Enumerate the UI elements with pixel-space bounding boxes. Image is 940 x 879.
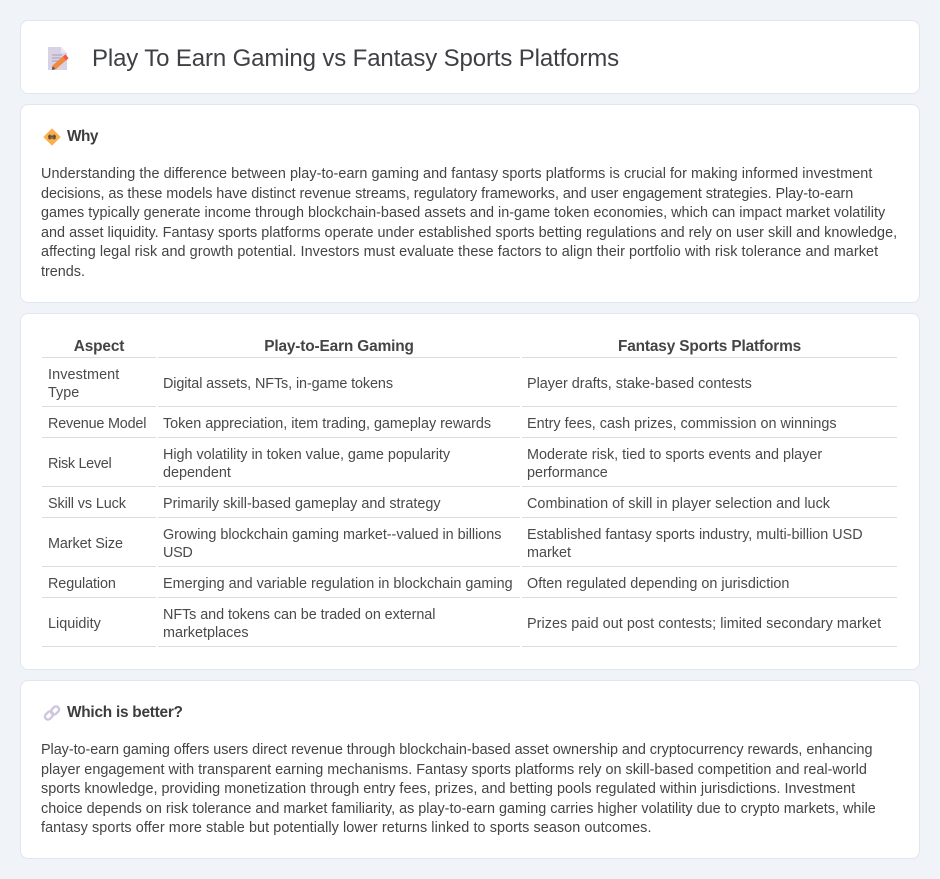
text block: why: trends. (41, 264, 85, 280)
row: market size: Market Size (48, 536, 123, 552)
cell: fantasy investment type: Player drafts, stake-based contests (527, 376, 752, 392)
panel: which is better (20, 680, 920, 859)
cell: p2e liquidity (163, 607, 435, 641)
row: investment type: Investment (48, 367, 119, 383)
text block: which is better: sports knowledge, providing monetization through entry fees, prizes, and betting pools regulated within jurisdictions. Investment (41, 781, 855, 797)
icon: document with pencil (48, 47, 69, 70)
cell: fantasy risk level: Moderate risk, tied to sports events and player (527, 447, 822, 463)
cell: fantasy revenue model: Entry fees, cash prizes, commission on winnings (527, 416, 837, 432)
row: liquidity: Liquidity (48, 616, 101, 632)
cell: fantasy skill vs luck: Combination of skill in player selection and luck (527, 496, 830, 512)
table header: play-to-earn gaming: Play-to-Earn Gaming (264, 338, 414, 355)
row: regulation: Regulation (48, 576, 116, 592)
cell: fantasy risk level: performance (527, 465, 608, 481)
text block: why: and asset liquidity. Fantasy sports platforms operate under established sports betting regulations and rely on user skill and knowledge, (41, 224, 897, 240)
cell: p2e revenue model: Token appreciation, item trading, gameplay rewards (163, 416, 491, 432)
cell: p2e risk level (163, 447, 450, 481)
cell: p2e market size (163, 527, 501, 561)
cell: p2e liquidity: NFTs and tokens can be traded on external (163, 607, 435, 623)
cell: p2e market size: USD (163, 545, 192, 561)
text block: why: Understanding the difference between play-to-earn gaming and fantasy sports platforms is crucial for making informed investment (41, 166, 872, 182)
text block: which is better: Play-to-earn gaming offers users direct revenue through blockchain-based asset ownership and cryptocurrency rewards, enhancing (41, 742, 872, 758)
text block: which is better (41, 742, 876, 836)
cell: fantasy market size (527, 527, 863, 561)
cell: p2e risk level: dependent (163, 465, 231, 481)
cell: fantasy risk level (527, 447, 822, 481)
icon: warning diamond (44, 128, 60, 146)
table header: fantasy sports platforms: Fantasy Sports Platforms (618, 338, 801, 355)
cell: fantasy market size: Established fantasy sports industry, multi-billion USD (527, 527, 863, 543)
title: Play To Earn Gaming vs Fantasy Sports Platforms (92, 45, 619, 72)
panel: comparison table (20, 313, 920, 670)
panel: header (20, 20, 920, 94)
row: investment type: Type (48, 385, 79, 401)
text block: which is better: player engagement with transparent earning mechanisms. Fantasy sports platforms rely on skill-based competition and real-world (41, 762, 867, 778)
text block: why (41, 166, 897, 280)
row: skill vs luck: Skill vs Luck (48, 496, 126, 512)
cell: p2e market size: Growing blockchain gaming market--valued in billions (163, 527, 501, 543)
cell: p2e risk level: High volatility in token value, game popularity (163, 447, 450, 463)
cell: p2e investment type: Digital assets, NFTs, in-game tokens (163, 376, 393, 392)
heading: why: Why (67, 128, 98, 145)
panel: why (20, 104, 920, 303)
icon: chain link (44, 705, 60, 721)
text block: which is better: choice depends on risk tolerance and market familiarity, as play-to-earn gaming carries higher volatility due to crypto markets, while (41, 800, 876, 816)
cell: fantasy regulation: Often regulated depending on jurisdiction (527, 576, 789, 592)
cell: fantasy market size: market (527, 545, 571, 561)
row: investment type (48, 367, 120, 401)
text block: why: decisions, as these models have distinct revenue streams, regulatory frameworks, and user engagement strategies. Play-to-earn (41, 186, 853, 202)
text block: why: affecting legal risk and growth potential. Investors must evaluate these factors to align their portfolio with risk tolerance and market (41, 244, 878, 260)
row: risk level: Risk Level (48, 456, 111, 472)
text block: which is better: fantasy sports offer more stable but potentially lower returns linked to sports season outcomes. (41, 820, 652, 836)
table header: aspect: Aspect (74, 338, 124, 355)
heading: which is better: Which is better? (67, 704, 183, 721)
cell: p2e regulation: Emerging and variable regulation in blockchain gaming (163, 576, 513, 592)
text block: why: games typically generate income through blockchain-based assets and in-game token economies, which can impact market volatility (41, 205, 885, 221)
cell: fantasy liquidity: Prizes paid out post contests; limited secondary market (527, 616, 881, 632)
cell: p2e liquidity: marketplaces (163, 625, 249, 641)
row: revenue model: Revenue Model (48, 416, 146, 432)
cell: p2e skill vs luck: Primarily skill-based gameplay and strategy (163, 496, 441, 512)
